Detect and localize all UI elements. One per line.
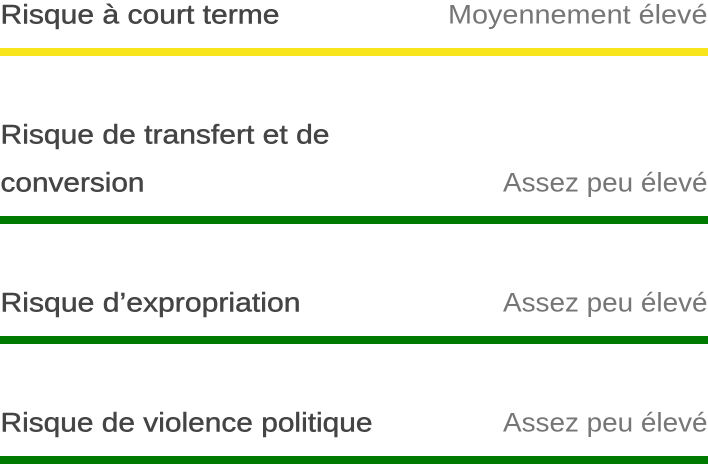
row: political violence risk bbox=[0, 408, 708, 464]
label: political violence risk: Risque de violence politique bbox=[0, 408, 373, 438]
label: transfer and conversion risk: Risque de transfert et de bbox=[0, 120, 330, 150]
row: transfer and conversion risk bbox=[0, 120, 708, 224]
rating: fairly low: Assez peu élevé bbox=[503, 168, 708, 198]
rating bar: green bbox=[0, 456, 708, 464]
rating: moderately high: Moyennement élevé bbox=[448, 0, 708, 30]
row: expropriation risk bbox=[0, 288, 708, 344]
row: short-term risk bbox=[0, 0, 708, 56]
rating: fairly low: Assez peu élevé bbox=[503, 288, 708, 318]
label: transfer and conversion risk: conversion bbox=[0, 168, 144, 198]
rating: fairly low: Assez peu élevé bbox=[503, 408, 708, 438]
label: short-term risk: Risque à court terme bbox=[0, 0, 280, 30]
rating bar: green bbox=[0, 336, 708, 344]
label: expropriation risk: Risque d’expropriation bbox=[0, 288, 300, 318]
rating bar: yellow bbox=[0, 48, 708, 56]
rating bar: green bbox=[0, 216, 708, 224]
